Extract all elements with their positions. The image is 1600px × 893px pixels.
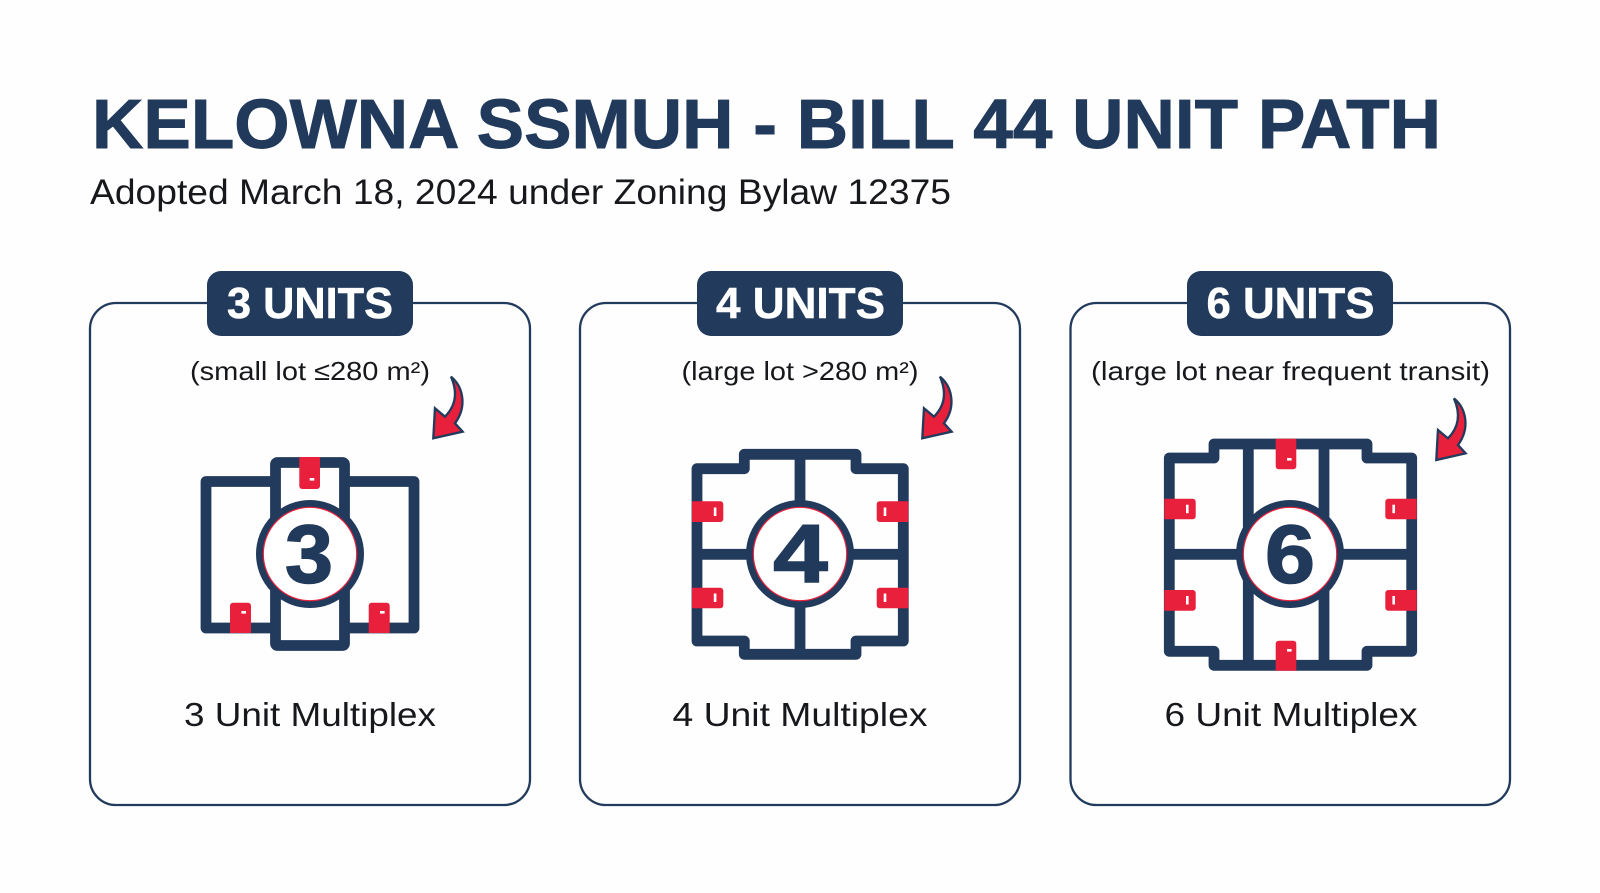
panel: 6 units: [1070, 271, 1510, 805]
floor plan: 3 units: [206, 457, 414, 646]
door: top: [1276, 439, 1296, 469]
door: top: [299, 457, 320, 489]
icon: curved arrow: [1436, 398, 1466, 460]
door: right upper: [1385, 499, 1417, 519]
door: right lower: [877, 588, 908, 608]
lot condition: (small lot ≤280 m²): [190, 356, 430, 386]
panel frame: [1070, 303, 1510, 805]
panel frame: [580, 303, 1020, 805]
unit count circle: 4: [773, 507, 828, 600]
door: left lower: [1164, 590, 1196, 611]
floor plan: 4 units: [692, 454, 908, 654]
subtitle: Adopted March 18, 2024 under Zoning Bylaw 12375: [90, 173, 951, 212]
door: bottom left: [230, 603, 251, 633]
badge: 6 units: 6 UNITS: [1206, 279, 1374, 328]
icon: curved arrow: [433, 377, 463, 438]
unit count circle: [1240, 504, 1340, 604]
plan name: 4 Unit Multiplex: [672, 696, 928, 733]
badge: 4 units: [697, 271, 903, 336]
badge: 4 units: 4 UNITS: [716, 279, 885, 328]
badge: 3 units: 3 UNITS: [227, 279, 393, 328]
panel frame: [90, 303, 530, 805]
unit count circle: [750, 504, 850, 604]
unit count circle: [260, 504, 360, 604]
door: bottom: [1276, 641, 1296, 671]
door: bottom right: [369, 603, 390, 633]
door: left lower: [692, 588, 723, 608]
title: KELOWNA SSMUH - BILL 44 UNIT PATH: [92, 85, 1441, 163]
door: right lower: [1385, 590, 1417, 611]
plan name: 6 Unit Multiplex: [1164, 696, 1418, 733]
badge: 3 units: [207, 271, 413, 336]
badge: 6 units: [1187, 271, 1393, 336]
door: right upper: [877, 501, 908, 522]
door: left upper: [692, 501, 723, 522]
lot condition: (large lot >280 m²): [682, 356, 918, 386]
unit count circle: 6: [1265, 508, 1315, 600]
unit count circle: 3: [285, 508, 333, 600]
door: left upper: [1164, 499, 1196, 519]
floor plan: 6 units: [1164, 439, 1417, 671]
icon: curved arrow: [922, 377, 952, 438]
lot condition: (large lot near frequent transit): [1091, 356, 1490, 386]
plan name: 3 Unit Multiplex: [184, 696, 437, 733]
panel: 3 units: [90, 271, 530, 805]
panel: 4 units: [580, 271, 1020, 805]
